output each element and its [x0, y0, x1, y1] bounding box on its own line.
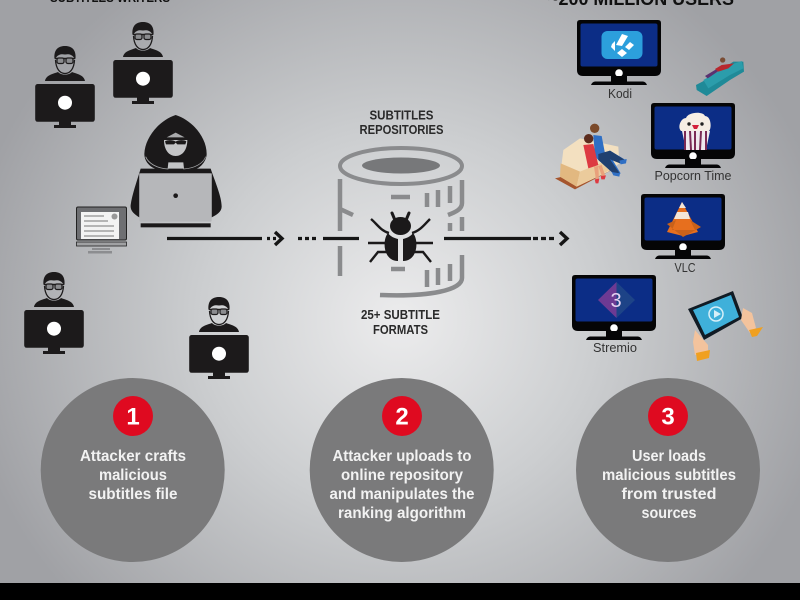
step 1 description: Attacker crafts	[80, 448, 186, 465]
step 2 description: Attacker uploads to	[332, 448, 472, 465]
label: Kodi: Kodi	[608, 87, 632, 101]
icon: Stremio television	[572, 275, 656, 340]
step 3 description: User loads	[632, 448, 706, 465]
step 2 description	[330, 448, 475, 522]
panel: step 1	[41, 378, 225, 562]
icon: Stremio television: 3	[610, 290, 622, 312]
icon: subtitle writer four	[189, 297, 249, 379]
heading: subtitles repositories	[360, 108, 444, 137]
icon: couple on sofa	[555, 124, 627, 189]
icon: hooded attacker with laptop	[131, 115, 222, 227]
label: Popcorn Time: Popcorn Time	[654, 169, 732, 183]
icon: repository cylinder	[340, 148, 462, 295]
step 3 description	[602, 448, 736, 522]
step 3 description: from trusted	[622, 486, 716, 503]
step 2 description: online repository	[341, 467, 463, 484]
icon: subtitle writer one	[35, 46, 95, 128]
icon: bug	[368, 213, 433, 262]
panel: step 3	[576, 378, 760, 562]
icon: subtitle writer two	[113, 22, 173, 104]
step 1 description	[80, 448, 186, 503]
icon: person relaxing on teal sofa	[696, 57, 744, 96]
heading: subtitle formats: FORMATS	[373, 323, 428, 337]
icon: subtitle writer three	[24, 272, 84, 354]
footer bar	[0, 583, 800, 600]
icon: Kodi television	[577, 20, 661, 85]
heading: subtitles repositories: SUBTITLES	[370, 108, 434, 122]
step 1 description: malicious	[99, 467, 167, 484]
icon: subtitles file on small monitor	[76, 207, 126, 254]
step 3 description: sources	[642, 505, 696, 522]
panel: step 2	[310, 378, 494, 562]
step 2 description: and manipulates the	[330, 486, 475, 503]
step 3 description: malicious subtitles	[602, 467, 736, 484]
step number 1: 1	[126, 404, 140, 430]
step number 2: 2	[395, 404, 409, 430]
label: Stremio: Stremio	[593, 341, 637, 355]
heading: subtitle formats	[361, 308, 440, 337]
icon: VLC television	[641, 194, 725, 259]
heading: subtitle formats: 25+ SUBTITLE	[361, 308, 440, 322]
arrow: repository to users	[444, 232, 567, 245]
icon: hands holding tablet	[688, 291, 763, 361]
step number 2	[382, 396, 422, 436]
step number 3	[648, 396, 688, 436]
step 2 description: ranking algorithm	[338, 505, 466, 522]
label: VLC: VLC	[674, 261, 696, 275]
heading: subtitles repositories: REPOSITORIES	[360, 123, 444, 137]
step 1 description: subtitles file	[88, 486, 178, 503]
icon: Popcorn Time television	[651, 103, 735, 168]
step number 3: 3	[661, 404, 675, 430]
arrow: attacker to repository	[167, 232, 359, 245]
step number 1	[113, 396, 153, 436]
